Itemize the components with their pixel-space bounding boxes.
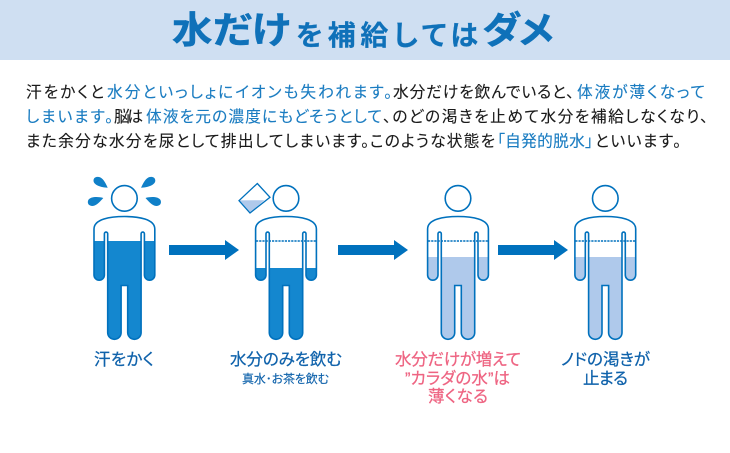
figure 1: sweating person: [88, 177, 161, 341]
label: water increases, body water diluted: ”カラダの水”は: [405, 369, 510, 388]
icon: sweat drops: [88, 177, 161, 206]
arrow 2: [338, 240, 408, 260]
label: water increases, body water diluted: [395, 350, 521, 406]
title band: [0, 0, 730, 60]
title: 水だけ: [172, 10, 290, 51]
label: thirst stops: 止まる: [583, 369, 628, 388]
label: sweating: 汗をかく: [94, 350, 154, 369]
label: thirst stops: ノドの渇きが: [561, 350, 651, 369]
figure 2: person drinking water only: [239, 184, 318, 341]
label: drinking water only: 真水･お茶を飲む: [242, 371, 329, 386]
title: ダメ: [482, 10, 554, 51]
arrow 3: [498, 240, 568, 260]
figure 4: thirst stops: [573, 186, 637, 341]
intro paragraph: [26, 84, 708, 150]
figure 3: body water diluted: [426, 186, 490, 341]
intro paragraph: 体液が薄くなって: [577, 84, 705, 102]
intro paragraph: 汗をかくと: [26, 84, 104, 102]
intro paragraph: このような状態を: [370, 132, 495, 150]
intro paragraph: しまいます。: [26, 108, 113, 126]
intro paragraph: といいます。: [595, 132, 681, 150]
label: thirst stops: [561, 350, 651, 388]
title: [172, 10, 554, 51]
icon: tilted glass: [239, 184, 270, 213]
intro paragraph: 脳は: [114, 108, 143, 126]
label: water increases, body water diluted: 薄くなる: [428, 387, 488, 406]
intro paragraph: 「自発的脱水」: [497, 132, 593, 150]
label: drinking water only: 水分のみを飲む: [230, 350, 342, 369]
intro paragraph: 水分といっしょにイオンも失われます。: [107, 84, 392, 102]
intro paragraph: 体液を元の濃度にもどそうとして: [146, 108, 382, 126]
intro paragraph: また余分な水分を尿として排出してしまいます。: [26, 132, 369, 150]
title: を補給しては: [296, 20, 478, 51]
label: drinking water only: [230, 350, 342, 386]
intro paragraph: 、のどの渇きを止めて水分を補給しなくなり、: [383, 108, 708, 126]
intro paragraph: 水分だけを飲んでいると、: [393, 84, 574, 102]
arrow 1: [169, 240, 239, 260]
label: water increases, body water diluted: 水分だけが増えて: [395, 350, 521, 369]
